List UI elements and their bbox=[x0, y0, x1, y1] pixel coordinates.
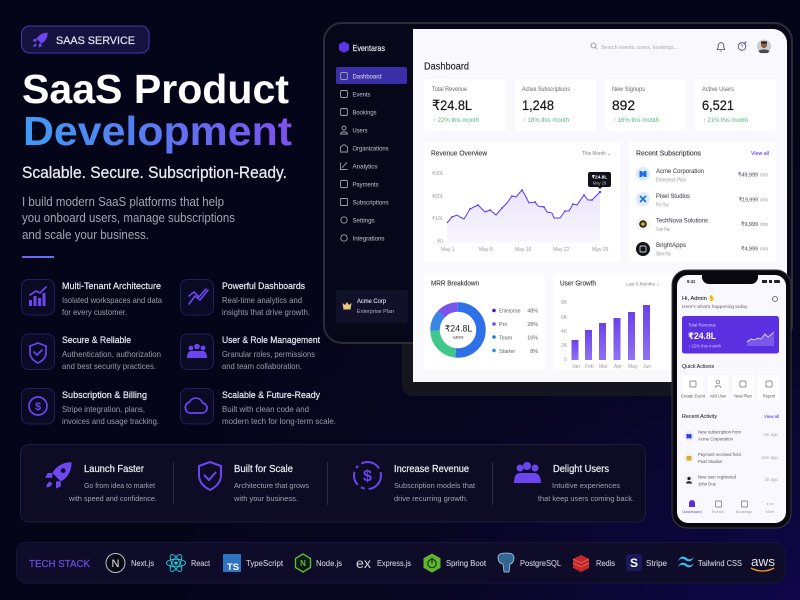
activity: new subscription bbox=[684, 430, 779, 442]
activity: new user: John Doe bbox=[698, 482, 716, 486]
tech stack heading: TECH STACK bbox=[29, 558, 90, 570]
stat card: Total Revenue: Total Revenue bbox=[432, 86, 467, 93]
feature: User and Role Management bbox=[180, 334, 320, 371]
nav items: Organizations bbox=[352, 146, 388, 152]
logo: Express.js: ex bbox=[356, 555, 371, 571]
row: BrightApps: Starter Plan bbox=[656, 252, 671, 258]
benefit: Launch Faster: Launch Faster bbox=[84, 464, 145, 475]
chart: user growth bars: Feb bbox=[585, 364, 594, 370]
list: recent subscriptions bbox=[629, 142, 776, 262]
logo: Express.js bbox=[356, 555, 411, 571]
feature: Secure and Reliable bbox=[22, 334, 161, 371]
chart: revenue overview: May 8 bbox=[479, 247, 493, 253]
badge label: SAAS SERVICE bbox=[56, 35, 135, 47]
logo: Stripe bbox=[626, 554, 668, 571]
stat card: Total Revenue bbox=[424, 79, 506, 131]
status bar bbox=[687, 279, 780, 284]
legend bbox=[492, 308, 538, 355]
stat card: Active Users: Active Users bbox=[702, 86, 734, 93]
stat card: Active Subscriptions: Active Subscriptions bbox=[522, 86, 570, 93]
intro paragraph: and scale your business. bbox=[22, 228, 149, 242]
quick actions: Quick Actions bbox=[682, 364, 714, 370]
panel: benefits bbox=[20, 444, 646, 522]
icon: cloud bbox=[185, 398, 207, 413]
activity: payment received: Pixel Studios bbox=[698, 459, 723, 464]
activity: payment received: Payment received from bbox=[698, 452, 741, 457]
logo: Spring Boot: Spring Boot bbox=[446, 559, 487, 568]
activity: new subscription: 2m ago bbox=[763, 432, 779, 437]
nav items: Integrations bbox=[352, 236, 384, 242]
feature: Multi-Tenant Architecture: for every customer. bbox=[62, 308, 127, 317]
benefit: Increase Revenue bbox=[354, 462, 476, 503]
feature: User and Role Management: User & Role Management bbox=[222, 335, 320, 346]
activity: new user bbox=[684, 474, 779, 486]
logo: Next.js: N bbox=[112, 558, 120, 570]
chart: revenue overview: This Month ⌄ bbox=[582, 151, 611, 157]
feature: Secure and Reliable: Authentication, authorization bbox=[62, 350, 161, 359]
greeting: Here's what's happening today. bbox=[682, 304, 748, 310]
logo: Eventaras bbox=[339, 42, 385, 53]
benefit: Launch Faster: Go from idea to market bbox=[84, 481, 156, 490]
benefit: Built for Scale: Built for Scale bbox=[234, 464, 293, 475]
feature: Powerful Dashboards: Real-time analytics and bbox=[222, 296, 302, 305]
legend: Pro bbox=[499, 322, 507, 328]
benefit: Increase Revenue: Subscription models that bbox=[394, 481, 476, 490]
row: Pixel Studios: Pro Plan bbox=[656, 202, 669, 208]
logo: Spring Boot bbox=[424, 554, 487, 573]
feature: Subscription and Billing bbox=[22, 388, 159, 426]
chart: revenue overview: May 22 bbox=[553, 247, 570, 253]
row: Pixel Studios: /mo bbox=[760, 198, 769, 204]
row: Acme Corporation: ₹49,999 bbox=[738, 172, 758, 178]
icon: dollar ring: $ bbox=[363, 468, 372, 485]
intro paragraph: I build modern SaaS platforms that help bbox=[22, 195, 224, 209]
chart: user growth bars: May bbox=[628, 364, 638, 370]
top bar: Search events, users, bookings... bbox=[601, 45, 678, 51]
chart: user growth bars: 2K bbox=[561, 343, 568, 349]
panel: tech stack bbox=[16, 542, 785, 583]
tab bar: Events bbox=[712, 509, 724, 514]
row: TechNova Solutions bbox=[636, 217, 769, 233]
activity: payment received: 15m ago bbox=[761, 455, 779, 460]
benefit: Launch Faster bbox=[45, 462, 157, 503]
nav items: Events bbox=[352, 92, 370, 98]
chart: user growth bars: 6K bbox=[561, 315, 568, 321]
benefit: Increase Revenue: drive recurring growth. bbox=[394, 494, 468, 503]
feature: User and Role Management: and team collaboration. bbox=[222, 362, 302, 371]
icon: rocket bbox=[45, 462, 72, 489]
recent activity: View all bbox=[764, 414, 779, 419]
icon: help bbox=[738, 42, 746, 50]
account card: Acme Corp: Acme Corp bbox=[357, 299, 387, 305]
chart: user growth bars bbox=[553, 273, 675, 370]
quick actions: Create Event bbox=[681, 394, 706, 398]
chart: MRR breakdown donut: MRR bbox=[453, 335, 464, 340]
page heading: Dashboard bbox=[424, 62, 469, 72]
nav items: Dashboard bbox=[352, 74, 382, 80]
feature: User and Role Management: Granular roles, permissions bbox=[222, 350, 315, 359]
nav items bbox=[340, 72, 388, 242]
feature: Powerful Dashboards bbox=[180, 280, 310, 317]
chart: MRR breakdown donut: ₹24.8L bbox=[445, 324, 472, 334]
logo: TypeScript: TS bbox=[227, 562, 239, 573]
row: Acme Corporation: /mo bbox=[760, 172, 769, 178]
stat card: Active Users: ↑ 21% this month bbox=[703, 118, 748, 124]
revenue card: ₹24.8L bbox=[688, 331, 716, 341]
row: BrightApps: ₹4,999 bbox=[741, 246, 758, 252]
chart: revenue overview: ₹30L bbox=[432, 171, 444, 177]
chart: revenue overview: May 1 bbox=[441, 247, 455, 253]
chart: revenue overview: ₹20L bbox=[432, 194, 444, 200]
chart: MRR breakdown donut: MRR Breakdown bbox=[431, 278, 479, 288]
legend: 48% bbox=[527, 308, 538, 314]
logo: Express.js: Express.js bbox=[377, 559, 411, 568]
logo: TypeScript bbox=[223, 554, 284, 573]
feature: Subscription and Billing: invoices and usage tracking. bbox=[62, 417, 159, 426]
quick actions bbox=[681, 364, 779, 400]
feature: Multi-Tenant Architecture bbox=[22, 280, 162, 317]
tab bar: Bookings bbox=[736, 509, 752, 514]
quick actions: New Plan bbox=[734, 394, 752, 398]
avatar bbox=[757, 40, 771, 54]
tab bar: More bbox=[765, 509, 775, 514]
logo: PostgreSQL: PostgreSQL bbox=[520, 559, 562, 568]
stat card: New Signups: ↑ 16% this month bbox=[613, 118, 659, 124]
quick actions: Add User bbox=[709, 394, 727, 398]
chart: user growth bars: Mar bbox=[599, 364, 608, 370]
activity: new subscription: New subscription from bbox=[698, 430, 741, 434]
stat card: Active Users: 6,521 bbox=[702, 97, 734, 113]
activity: new subscription: Acme Corporation bbox=[698, 436, 733, 442]
feature: Multi-Tenant Architecture: Isolated workspaces and data bbox=[62, 296, 162, 305]
benefit: Delight Users: that keep users coming back. bbox=[538, 494, 634, 503]
stat card: New Signups: 892 bbox=[612, 97, 635, 113]
row: Acme Corporation: Acme Corporation bbox=[656, 169, 704, 175]
tab bar bbox=[682, 500, 775, 514]
revenue card bbox=[682, 316, 779, 354]
legend: 28% bbox=[527, 322, 538, 328]
chart: user growth bars: Jun bbox=[643, 364, 651, 370]
icon: rocket bbox=[33, 33, 48, 48]
sidebar bbox=[336, 42, 408, 323]
title: Development bbox=[23, 108, 292, 154]
top bar bbox=[591, 40, 771, 54]
icon: dollar coin: $ bbox=[35, 401, 41, 413]
feature: Powerful Dashboards: insights that drive growth. bbox=[222, 308, 310, 317]
stat card: Active Subscriptions: 1,248 bbox=[522, 97, 554, 113]
benefit: Launch Faster: with speed and confidence. bbox=[68, 494, 157, 503]
nav: active item bbox=[336, 67, 407, 84]
chart: user growth bars: Last 6 Months ⌄ bbox=[626, 282, 660, 288]
logo: Next.js bbox=[106, 554, 154, 572]
chart: user growth bars: User Growth bbox=[560, 278, 596, 288]
feature: Scalable and Future-Ready: Built with clean code and bbox=[222, 405, 309, 414]
chart: user growth bars: Jan bbox=[572, 364, 580, 370]
row: Acme Corporation: Enterprise Plan bbox=[656, 178, 686, 184]
benefit: Delight Users: Delight Users bbox=[553, 464, 609, 475]
stat card: Active Subscriptions bbox=[515, 79, 596, 131]
feature: Scalable and Future-Ready: Scalable & Future-Ready bbox=[222, 390, 320, 401]
legend: Enterprise bbox=[499, 308, 520, 314]
icon: bell bbox=[717, 43, 725, 51]
feature: Scalable and Future-Ready: modern tech for long-term scale. bbox=[222, 417, 336, 426]
icon: users bbox=[187, 344, 207, 358]
recent activity bbox=[682, 414, 779, 486]
icon: users bbox=[514, 462, 541, 483]
title: SaaS Product bbox=[22, 66, 289, 112]
stat card: Total Revenue: ₹24.8L bbox=[432, 97, 472, 113]
nav items: Users bbox=[352, 128, 368, 134]
nav items: Subscriptions bbox=[352, 200, 388, 206]
logo: Next.js: Next.js bbox=[131, 559, 154, 568]
logo: TypeScript: TypeScript bbox=[246, 559, 284, 568]
tagline: Scalable. Secure. Subscription-Ready. bbox=[22, 164, 287, 182]
logo: Node.js: Node.js bbox=[316, 559, 342, 568]
chart: MRR breakdown donut bbox=[424, 273, 545, 370]
stat card: New Signups: New Signups bbox=[612, 86, 645, 93]
chart: user growth bars: 8K bbox=[561, 300, 568, 306]
laptop: dashboard mockup bbox=[324, 23, 792, 396]
legend: Starter bbox=[499, 349, 515, 355]
benefit: Delight Users bbox=[514, 462, 634, 503]
logo: Stripe: Stripe bbox=[646, 559, 668, 568]
account card: Acme Corp: Enterprise Plan bbox=[357, 309, 394, 315]
logo: React bbox=[166, 553, 211, 573]
nav items: Analytics bbox=[352, 164, 378, 170]
stat card: Active Users bbox=[695, 79, 776, 131]
logo: Redis: Redis bbox=[596, 559, 615, 568]
chart: revenue overview: ₹10L bbox=[432, 216, 444, 222]
greeting bbox=[682, 294, 778, 310]
chart: revenue overview: Revenue Overview bbox=[431, 148, 488, 158]
list: recent subscriptions: Recent Subscriptions bbox=[636, 148, 701, 158]
intro paragraph bbox=[22, 195, 235, 242]
activity: new user: 1h ago bbox=[765, 477, 779, 482]
activity: payment received bbox=[684, 452, 779, 464]
revenue card: ↑ 22% this month bbox=[688, 344, 722, 348]
row: TechNova Solutions: Team Plan bbox=[656, 227, 670, 233]
revenue card: Total Revenue bbox=[688, 322, 716, 328]
greeting: Hi, Admin ✋ bbox=[682, 294, 716, 302]
row: TechNova Solutions: ₹9,999 bbox=[741, 221, 758, 228]
nav items: Settings bbox=[352, 218, 374, 224]
logo: Stripe: S bbox=[630, 556, 638, 570]
chart: user growth bars: 0 bbox=[564, 357, 567, 363]
phone mockup bbox=[672, 270, 791, 528]
icon: help: ? bbox=[741, 44, 744, 50]
logo: Node.js bbox=[296, 554, 342, 572]
chart: user growth bars: 4K bbox=[561, 329, 568, 335]
intro paragraph: you onboard users, manage subscriptions bbox=[22, 211, 235, 225]
logo: Tailwind CSS: Tailwind CSS bbox=[698, 559, 742, 568]
feature: Secure and Reliable: and best security practices. bbox=[62, 362, 156, 371]
logo: Node.js: N bbox=[300, 559, 306, 568]
benefit: Delight Users: Intuitive experiences bbox=[552, 481, 620, 490]
legend: 8% bbox=[530, 349, 538, 355]
nav items: Bookings bbox=[352, 110, 376, 116]
nav items: Payments bbox=[352, 182, 378, 188]
feature: Powerful Dashboards: Powerful Dashboards bbox=[222, 281, 305, 292]
logo: AWS: aws bbox=[751, 554, 776, 569]
stat card: New Signups bbox=[605, 79, 686, 131]
logo: Eventaras: Eventaras bbox=[352, 44, 385, 53]
account card: Acme Corp bbox=[336, 290, 408, 323]
feature: Multi-Tenant Architecture: Multi-Tenant Architecture bbox=[62, 281, 161, 292]
feature: Subscription and Billing: Subscription & Billing bbox=[62, 390, 147, 401]
feature: Scalable and Future-Ready bbox=[180, 388, 336, 426]
tooltip: May 29 bbox=[593, 180, 607, 186]
icon: trend lines bbox=[189, 289, 208, 304]
row: BrightApps: BrightApps bbox=[656, 243, 686, 249]
tooltip: ₹24.8L bbox=[592, 174, 607, 180]
list: recent subscriptions: View all bbox=[751, 151, 769, 157]
quick actions: Report bbox=[763, 394, 776, 398]
feature: Secure and Reliable: Secure & Reliable bbox=[62, 335, 131, 346]
row: TechNova Solutions: /mo bbox=[760, 222, 769, 228]
chart: user growth bars: Apr bbox=[614, 364, 622, 370]
badge: SaaS service bbox=[22, 26, 149, 53]
logo: PostgreSQL bbox=[498, 553, 562, 572]
tab bar: Dashboard bbox=[682, 509, 702, 514]
chart: revenue overview bbox=[424, 142, 620, 262]
benefit: Increase Revenue: Increase Revenue bbox=[394, 464, 469, 475]
title bbox=[22, 66, 292, 154]
logo: Redis bbox=[573, 555, 615, 572]
feature: Subscription and Billing: Stripe integration, plans, bbox=[62, 405, 145, 414]
icon: bar chart bbox=[29, 287, 46, 306]
icon: shield bbox=[30, 343, 46, 363]
stat card: Total Revenue: ↑ 22% this month bbox=[433, 118, 479, 124]
legend: 16% bbox=[527, 336, 538, 342]
row: Acme Corporation bbox=[636, 167, 769, 184]
chart: revenue overview: May 29 bbox=[592, 247, 609, 253]
row: Pixel Studios bbox=[636, 192, 769, 208]
benefit: Built for Scale: Architecture that grows bbox=[234, 481, 309, 490]
activity: new user: New user registered bbox=[698, 474, 736, 480]
icon: shield bbox=[199, 462, 221, 490]
stat card: Active Subscriptions: ↑ 18% this month bbox=[523, 118, 569, 124]
benefit: Built for Scale: with your business. bbox=[233, 494, 298, 503]
status bar: 9:41 bbox=[687, 279, 696, 284]
logo: React: React bbox=[191, 559, 211, 568]
recent activity: Recent Activity bbox=[682, 414, 717, 420]
row: Pixel Studios: ₹19,999 bbox=[739, 196, 758, 204]
row: TechNova Solutions: TechNova Solutions bbox=[656, 218, 708, 224]
row: BrightApps: /mo bbox=[760, 246, 769, 252]
logo: Tailwind CSS bbox=[678, 557, 742, 568]
row: Pixel Studios: Pixel Studios bbox=[656, 194, 690, 200]
benefit: Built for Scale bbox=[199, 462, 309, 503]
legend: Team bbox=[499, 336, 513, 342]
chart: revenue overview: May 15 bbox=[515, 247, 532, 253]
tooltip bbox=[588, 172, 611, 189]
chart: revenue overview: ₹0 bbox=[437, 239, 443, 245]
row: BrightApps bbox=[636, 242, 769, 258]
